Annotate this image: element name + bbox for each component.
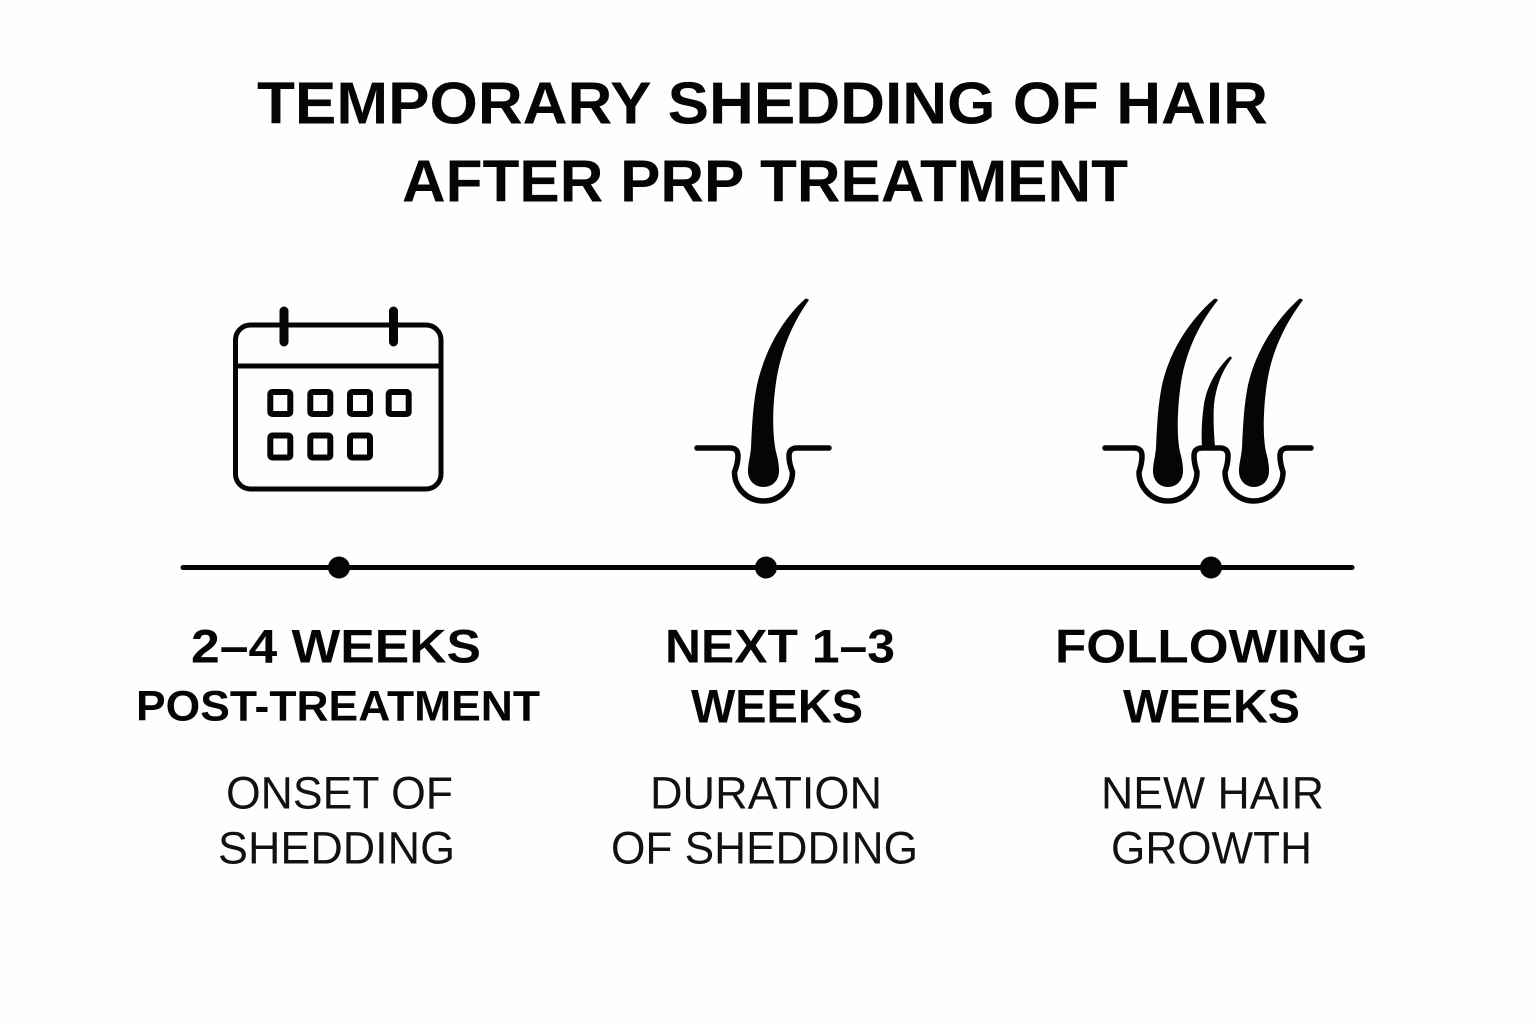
caption: onset of shedding: [218, 768, 455, 874]
caption: duration of shedding: [611, 768, 918, 874]
caption: new hair growth: GROWTH: [1111, 822, 1312, 874]
label: growth timing: WEEKS: [1123, 680, 1300, 732]
caption: new hair growth: [1101, 768, 1324, 874]
label: onset timing: 2–4 WEEKS: [191, 620, 481, 672]
caption: duration of shedding: DURATION: [650, 768, 882, 818]
title: TEMPORARY SHEDDING OF HAIR: [257, 70, 1268, 136]
icon: single hair follicle: [697, 299, 829, 501]
label: growth timing: FOLLOWING: [1055, 620, 1368, 672]
caption: new hair growth: NEW HAIR: [1101, 768, 1324, 818]
label: onset timing: POST-TREATMENT: [136, 682, 540, 730]
icon: calendar: [236, 311, 441, 489]
label: duration timing: NEXT 1–3: [665, 620, 895, 672]
timeline: [183, 556, 1352, 578]
title: AFTER PRP TREATMENT: [402, 148, 1128, 214]
label: duration timing: WEEKS: [691, 680, 863, 732]
caption: duration of shedding: OF SHEDDING: [611, 822, 918, 874]
icon: multiple hairs with new growth: [1105, 299, 1311, 501]
label: duration timing: [665, 620, 895, 732]
label: onset timing: [136, 620, 540, 730]
caption: onset of shedding: ONSET OF: [226, 768, 453, 818]
label: growth timing: [1055, 620, 1368, 732]
title: [257, 70, 1268, 214]
caption: onset of shedding: SHEDDING: [218, 822, 455, 874]
